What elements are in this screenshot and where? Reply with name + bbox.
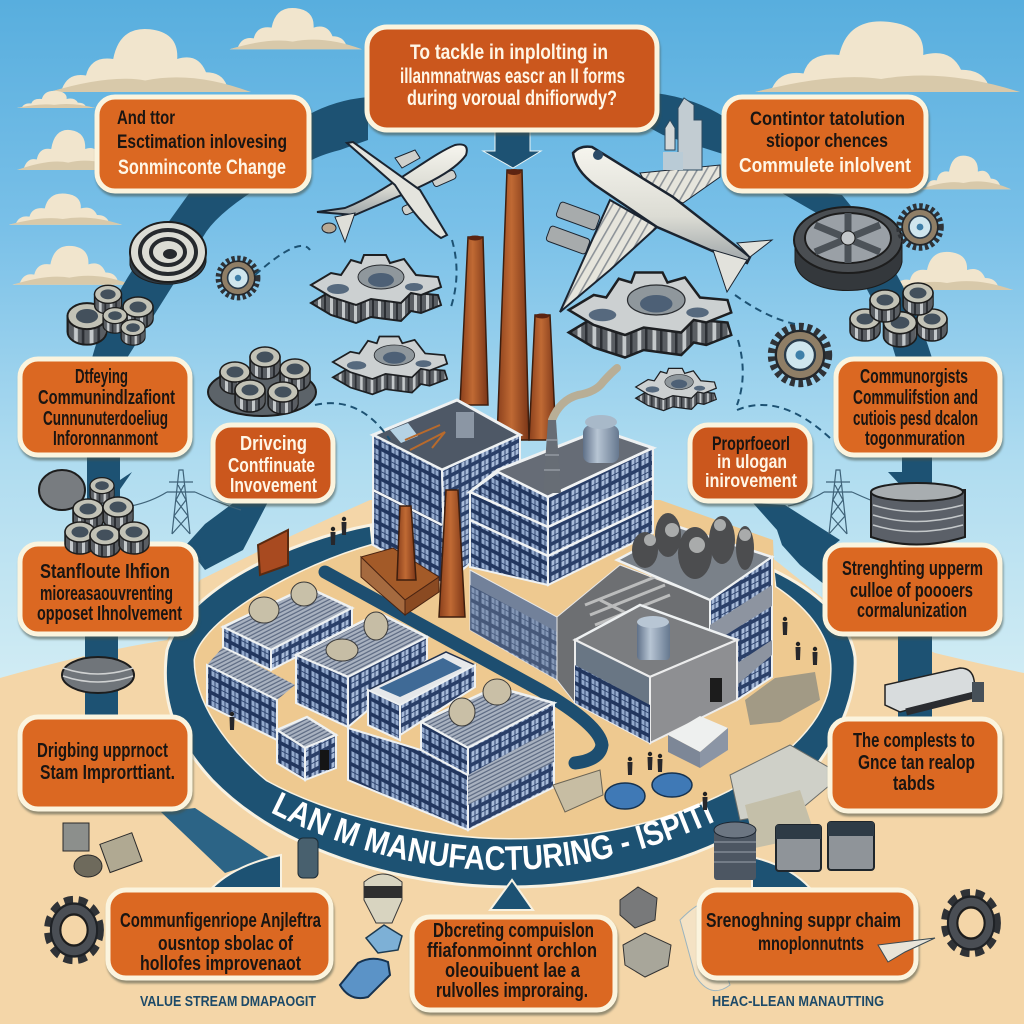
box: right one: Communorgists [860, 366, 968, 388]
small striped block [668, 716, 728, 768]
box: bottom right: Srenoghning suppr chaim [706, 910, 901, 932]
grey boxes bottom [620, 887, 671, 977]
box: right three: Gnce tan realop [858, 752, 975, 774]
box: left one: Cunnunuterdoeliug [43, 408, 168, 430]
box: bottom left: hollofes improvenaot [140, 953, 301, 975]
box: bottom left: ousntop sbolac of [158, 933, 293, 955]
sand ground [0, 500, 1024, 1024]
pipe across factory site [325, 572, 602, 763]
box: bottom left [108, 890, 331, 978]
box: right two [825, 545, 1000, 634]
wire coil on left [62, 657, 134, 693]
box: professional improvement: inirovement [705, 471, 798, 492]
box: left one: Inforonnanmont [53, 428, 158, 450]
arrow: from box driving improvement to the ring [186, 498, 270, 570]
box: left two: mioreasaouvrenting [40, 583, 173, 605]
arrow: from box professional improvement to the ring [753, 503, 840, 585]
box: top: during voroual dnifiorwdy? [407, 87, 617, 110]
box: upper left: Esctimation inlovesing [117, 132, 287, 153]
circular process arrows in the sky [85, 93, 932, 720]
steel drum on right [871, 483, 965, 544]
box: left three: Drigbing upprnoct [37, 740, 168, 762]
tanker truck [885, 668, 984, 715]
box: right one [836, 359, 1000, 455]
smoke [552, 368, 617, 420]
crates pile near factory [745, 672, 820, 725]
arrow tip on bottom right box [878, 938, 935, 962]
box: driving continuate improvement [213, 425, 333, 501]
box: left two: Stanfloute Ihfion [40, 561, 170, 583]
box: upper left: And ttor [117, 108, 175, 129]
arrowheads from ring to bottom boxes [212, 855, 810, 910]
gear clusters center [311, 255, 731, 411]
box: left one [20, 359, 190, 455]
box: top [367, 27, 657, 130]
dark boxes [776, 822, 874, 871]
box: upper right: Commulete inlolvent [739, 155, 911, 177]
nut tray [208, 347, 316, 416]
box: left three: Stam Improrttiant. [40, 762, 175, 784]
box: right two: cormalunization [857, 600, 967, 622]
small blue car [340, 959, 390, 998]
box: left three [20, 717, 190, 809]
ground inside ring [195, 500, 830, 838]
box: professional improvement [690, 425, 810, 501]
box: left two [20, 544, 196, 634]
rear building [373, 400, 520, 585]
box: driving continuate improvement: Contfinuate [228, 455, 315, 477]
box: left one: Dtfeying [75, 366, 128, 388]
courtyard machine building [575, 605, 737, 743]
caption: lean manufacturing: HEAC-LLEAN MANAUTTING [712, 993, 884, 1010]
tire icon right [946, 894, 996, 952]
box: bottom center: Dbcreting compuislon [433, 920, 594, 942]
box: bottom right: mnoplonnutnts [758, 934, 864, 955]
right airplane [546, 147, 772, 312]
statue roof building [617, 513, 772, 700]
box: driving continuate improvement: Drivcing [240, 433, 307, 455]
front building B [296, 612, 427, 727]
blue cars [605, 773, 692, 809]
box: upper left [97, 97, 309, 191]
right drum gear [794, 207, 940, 290]
stacked components on left [39, 470, 149, 557]
nut stack upper right [850, 283, 947, 347]
box: bottom left: Communfigenriope Anjleftra [120, 910, 322, 932]
box: professional improvement: in ulogan [717, 452, 787, 473]
nut stack upper left [68, 285, 153, 345]
box: right one: togonmuration [865, 428, 965, 450]
notice sign [258, 530, 288, 575]
box: upper right: Contintor tatolution [750, 109, 905, 130]
box: bottom right [699, 890, 916, 978]
left coil and small gear [130, 222, 257, 297]
box: bottom center: ffiafonmoinnt orchlon [427, 940, 597, 962]
caption: value stream: VALUE STREAM DMAPAOGIT [140, 993, 316, 1010]
box: upper left: Sonminconte Change [118, 156, 286, 179]
arrow: from top box down to chimney [483, 128, 541, 168]
tall central building [470, 415, 737, 703]
main chimneys [460, 169, 556, 440]
supply crates near banner [730, 745, 842, 848]
box: left two: opposet Ihnolvement [37, 603, 182, 625]
box: professional improvement: Proprfoeorl [712, 434, 790, 455]
bottom left items [63, 823, 318, 878]
glove shape [680, 904, 730, 991]
box: right three: tabds [893, 773, 935, 795]
box: bottom center: oleouibuent lae a [445, 960, 581, 982]
box: right two: culloe of poooers [850, 580, 973, 602]
box: bottom center [412, 917, 615, 1010]
box: right three [830, 719, 1000, 811]
ring: lean manufacturing circular band [161, 525, 855, 887]
front building A [207, 582, 352, 740]
box: upper right [724, 97, 926, 191]
brick furnace with small chimneys [361, 490, 465, 617]
rocket structures [663, 98, 702, 170]
dashed route lines [255, 240, 830, 440]
box: top: To tackle in inplolting in [410, 41, 608, 64]
box: top: illanmnatrwas eascr an II forms [400, 65, 625, 88]
box: upper right: stiopor chences [766, 131, 888, 152]
box: driving continuate improvement: Invovement [230, 475, 317, 497]
front building C with blue roof [368, 652, 475, 740]
gear ring right [772, 327, 828, 383]
box: right three: The complests to [853, 730, 975, 752]
annex building [277, 717, 336, 780]
box: left one: Communindlzafiont [38, 387, 175, 409]
power towers [131, 470, 898, 534]
box: bottom center: rulvolles improraing. [436, 980, 588, 1002]
banner title: LAN M MANUFACTURING - ISPITI [272, 792, 714, 870]
yard machinery [553, 770, 603, 812]
left airplane [317, 142, 467, 242]
people [230, 517, 818, 810]
front building D [348, 679, 554, 830]
coin stack [714, 822, 756, 880]
clouds [9, 8, 1020, 290]
flask and cube [364, 874, 402, 953]
tire icon left [49, 901, 99, 959]
